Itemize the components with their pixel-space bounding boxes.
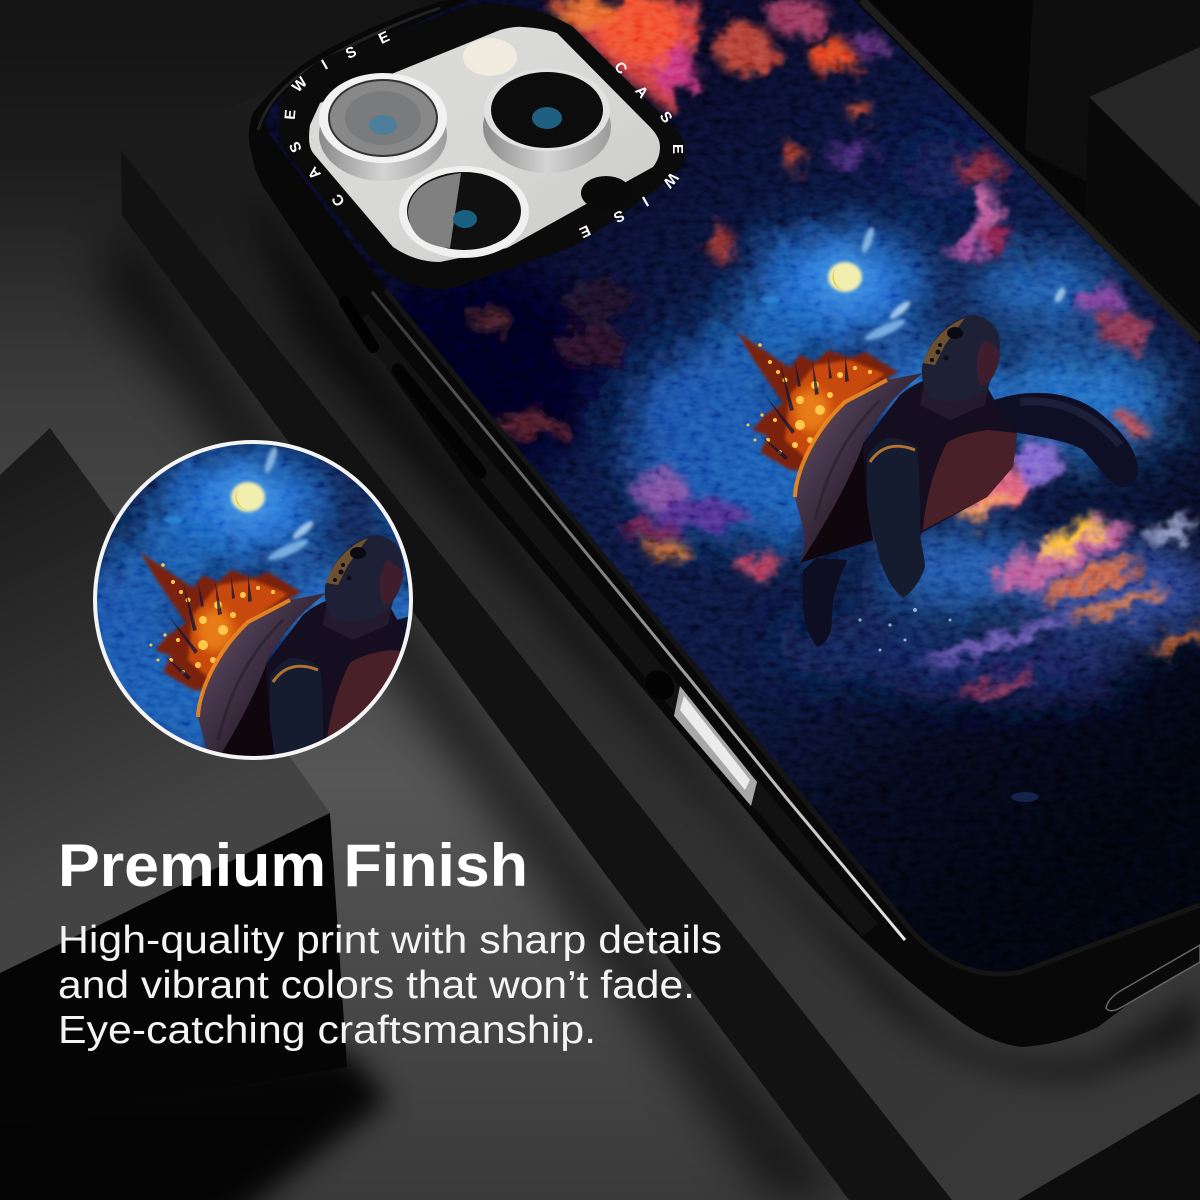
camera frame [279,4,685,289]
shadow of main block on floor [100,215,849,1200]
camera island [279,4,686,289]
description text [58,919,722,1052]
brand text on frame: S [656,108,676,126]
brand text on frame: S [611,206,627,226]
brand text on frame: A [631,82,652,102]
zoomed detail circle [93,440,413,760]
brand text on frame: I [319,57,331,74]
brand text on frame: E [282,109,299,120]
brand text on frame: C [610,58,631,78]
description text: and vibrant colors that won’t fade. [58,964,695,1007]
lower lens [399,166,529,258]
main platform side face [121,150,952,1200]
case edge highlight [372,292,905,940]
phone shadow [240,180,1200,1080]
brand text on frame: A [304,163,325,183]
brand text on frame: E [376,28,392,48]
lower right dark block [1018,1093,1200,1200]
case rim top highlight [258,8,440,130]
right case edge band [862,0,1200,340]
sensor hole [581,176,631,210]
phone case body [249,0,1200,1047]
upper right block [1089,47,1200,207]
camera plate [309,27,660,262]
description text: Eye-catching craftsmanship. [58,1009,596,1052]
brand text on frame [282,28,686,241]
artwork on phone back [250,0,1200,975]
paint edge shadow [385,290,1200,974]
brand text on frame: E [577,221,593,241]
brand text on frame: I [639,192,651,209]
brand text on frame: S [343,43,359,63]
glossy case band [360,320,870,930]
microphone hole [640,664,680,706]
heading: Premium Finish [58,832,528,899]
shadow of lower platform on floor [0,1050,390,1200]
side switch [345,302,373,347]
brand text on frame: W [289,73,311,96]
lower left platform front [0,813,347,1127]
volume button [398,370,480,472]
brand text on frame: W [659,169,682,191]
left lens [319,73,447,181]
brand text on frame: S [286,139,306,155]
bottom charging port [1106,945,1200,1011]
upper right backdrop [860,0,1200,345]
flash [463,38,517,76]
description text: High-quality print with sharp details [58,919,722,962]
brand text on frame: E [669,144,686,154]
brand text on frame: C [328,190,349,210]
lower left platform top [0,428,330,973]
right lens [483,69,611,173]
silver side button [674,686,757,806]
